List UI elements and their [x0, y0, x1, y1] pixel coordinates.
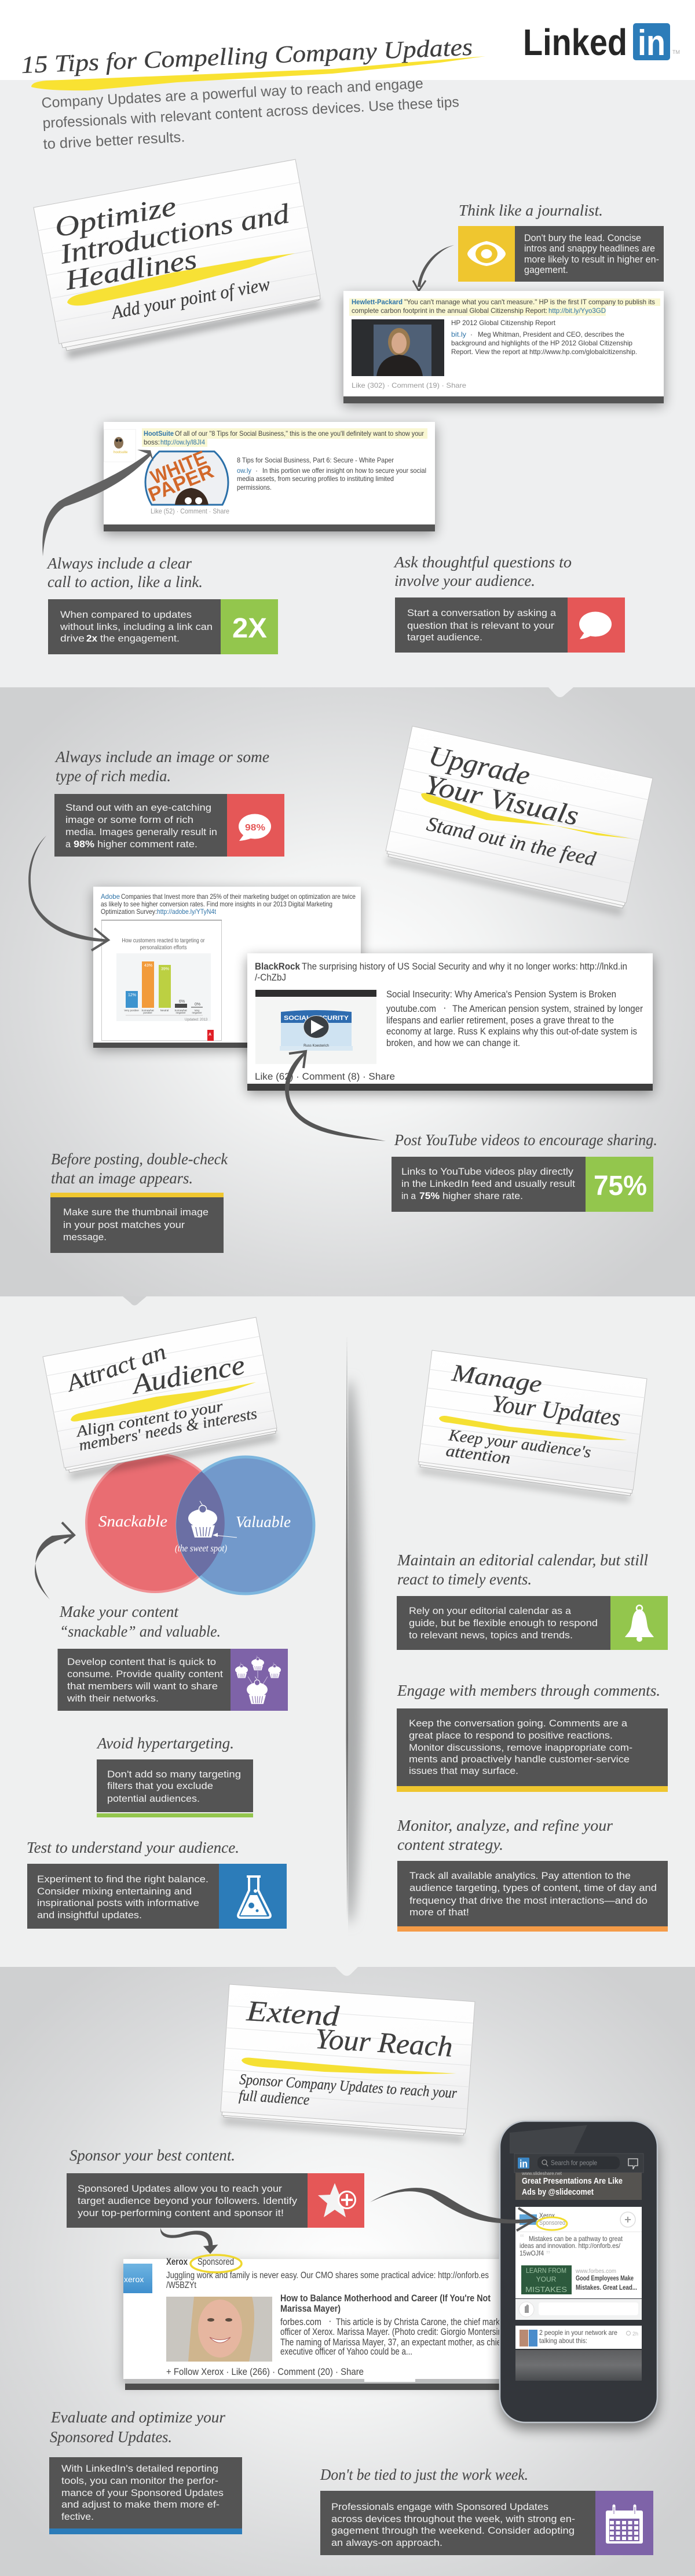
tip box: comments: great place to respond to positive reactions. [409, 1730, 613, 1741]
title with yellow brush stroke [21, 34, 485, 90]
phone post card: “ [520, 2232, 524, 2245]
heading: editorial calendar: Maintain an editorial calendar, but still [397, 1551, 648, 1569]
tip box: targeting: Don't add so many targeting [107, 1769, 241, 1780]
LinkedIn post: Hewlett-Packard: bit.ly [451, 330, 466, 338]
tip box: journalist: Don't bury the lead. Concise [524, 232, 641, 243]
phone top bar [514, 2154, 643, 2173]
bar chart: customer reaction: 6% [179, 1000, 185, 1004]
LinkedIn post: Hewlett-Packard: Like (302) · Comment (19) · Share [352, 381, 466, 389]
icon: eye [458, 226, 515, 282]
phone banner [515, 2171, 642, 2200]
tip box: thumbnail: message. [63, 1231, 107, 1243]
tip box: analytics: more of that! [409, 1907, 469, 1918]
LinkedIn post: Xerox: forbes.com [280, 2316, 321, 2327]
intro text: to drive better results. [43, 129, 185, 152]
phone post card: ” [546, 2249, 550, 2262]
tip box: 2X: the engagement. [100, 633, 180, 644]
tip box: 2X: When compared to updates [60, 609, 192, 620]
phone post card: 15wOJf4 [520, 2249, 544, 2257]
venn diagram: snackable and valuable: (the sweet spot) [175, 1543, 227, 1554]
tip box: analytics [397, 1861, 668, 1932]
LinkedIn post: Hewlett-Packard: background and highlights of the HP 2012 Global Citizenship [451, 339, 632, 347]
LinkedIn post: Hewlett-Packard: Meg Whitman, President and CEO, describes the [478, 330, 624, 338]
bar chart: customer reaction: How customers reacted to targeting or [122, 937, 205, 944]
video thumbnail: social security: SOCIAL SECURITY [284, 1015, 349, 1022]
arrow: down to Xerox post [160, 2228, 216, 2253]
LinkedIn post: Adobe [93, 887, 361, 1050]
tip box: 2X [48, 599, 278, 654]
heading: double-check image: that an image appears. [51, 1169, 193, 1187]
tip box: 98%: image or some form of rich [65, 814, 193, 825]
LinkedIn post: Xerox: Xerox [166, 2256, 188, 2267]
LinkedIn post: HootSuite: ow.ly [237, 467, 251, 475]
tip box: experiment: inspirational posts with informative [37, 1897, 199, 1908]
tip box: questions [395, 597, 625, 653]
image: white paper badge: WHITE [148, 447, 210, 489]
bar chart: customer reaction: Updated: 2013 [185, 1018, 208, 1022]
LinkedIn post: HootSuite: In this portion we offer insight on how to secure your social [262, 467, 426, 475]
LinkedIn post: Hewlett-Packard: Hewlett-Packard [352, 298, 403, 306]
bar chart: customer reaction: negative [175, 1011, 186, 1014]
tip box: reporting tools: fective. [61, 2511, 94, 2522]
tip box: targeting: potential audiences. [107, 1793, 200, 1804]
section background: extend reach [0, 1967, 695, 2576]
image: white paper badge [145, 447, 228, 506]
phone top bar: in [520, 2158, 528, 2170]
heading: thoughtful questions: Ask thoughtful questions to [393, 553, 572, 571]
arrow: to YouTube thumbnail [285, 1051, 386, 1141]
tip box: snackable content: consume. Provide quality content [67, 1668, 223, 1679]
heading: evaluate and optimize: Sponsored Updates. [50, 2428, 172, 2446]
LinkedIn post: HootSuite: Like (52) · Comment · Share [151, 507, 229, 515]
note card: attract an audience [43, 1317, 277, 1479]
title with yellow brush stroke: 15 Tips for Compelling Company Updates [21, 34, 473, 79]
venn diagram: snackable and valuable [86, 1454, 314, 1594]
phone post card: Mistakes can be a pathway to great [529, 2235, 623, 2243]
LinkedIn post: BlackRock [247, 953, 653, 1093]
video thumbnail: social security [255, 990, 376, 1064]
LinkedIn post: Xerox: Juggling work and family is never easy. Our CMO shares some practical advice: http://onforb.es [166, 2271, 489, 2280]
note card: upgrade your visuals: Upgrade [426, 740, 533, 792]
tip box: thumbnail: Make sure the thumbnail image [63, 1207, 209, 1218]
LinkedIn post: HootSuite: 8 Tips for Social Business, Part 6: Secure - White Paper [237, 456, 394, 464]
tip box: 98%: a [65, 839, 71, 850]
tip box: comments [397, 1708, 668, 1792]
tip box: 2X: drive [60, 633, 85, 644]
phone post card: ideas and innovation. http://onforb.es/ [520, 2242, 621, 2250]
LinkedIn post: Xerox: How to Balance Motherhood and Career (If You're Not [280, 2293, 491, 2304]
tip box: reporting tools: With LinkedIn's detailed reporting [61, 2463, 218, 2474]
heading: not just the work week: Don't be tied to just the work week. [320, 2466, 528, 2483]
tip box: always on: an always-on approach. [331, 2537, 442, 2548]
LinkedIn post: Xerox [123, 2256, 517, 2390]
callout: phone sponsored highlight [537, 2217, 567, 2230]
tip box: comments: Monitor discussions, remove inappropriate com- [409, 1742, 632, 1753]
bar chart: customer reaction: 12% [128, 993, 136, 997]
LinkedIn logo: TM [672, 49, 680, 55]
arrow: to Adobe post [28, 836, 108, 950]
photo: speaker [352, 319, 444, 376]
LinkedIn post: Hewlett-Packard: Report. View the report at http://www.hp.com/globalcitizenship. [451, 348, 637, 356]
tip box: snackable content: Develop content that is quick to [67, 1656, 216, 1667]
heading: test your audience: Test to understand your audience. [27, 1839, 239, 1856]
bar chart: customer reaction: positive [143, 1011, 152, 1014]
heading: snackable and valuable: Make your content [59, 1603, 180, 1620]
tip box: thumbnail: in your post matches your [63, 1219, 185, 1230]
section background: visuals [0, 687, 695, 1296]
LinkedIn post: Adobe: Optimization Survey: [101, 908, 157, 916]
icon: speech bubble [579, 612, 612, 639]
LinkedIn post: HootSuite: media assets, from securing profiles to instituting limited [237, 475, 394, 483]
tip box: reporting tools: mance of your Sponsored Updates [61, 2487, 224, 2498]
note card: extend your reach: Your Reach [314, 2022, 453, 2063]
tip box: experiment: Consider mixing entertaining and [37, 1886, 192, 1897]
bar chart: customer reaction: Very [194, 1009, 200, 1012]
tip box: 75%: 75% [594, 1171, 647, 1201]
tip box: analytics: Track all available analytics. Pay attention to the [409, 1870, 631, 1881]
LinkedIn post: BlackRock: broken, and how we can change it. [386, 1037, 520, 1048]
tip box: 75%: in the LinkedIn feed and usually result [401, 1178, 575, 1189]
logo: xerox: xerox [124, 2275, 144, 2284]
tip box: always on: gagement through the weekend. Consider adopting [331, 2525, 575, 2536]
tip box: 2X: without links, including a link can [60, 621, 213, 632]
tip box: sponsored updates: target audience beyond your followers. Identify [78, 2195, 298, 2206]
phone banner: www.slideshare.net [521, 2171, 562, 2176]
venn diagram: snackable and valuable: Snackable [98, 1513, 167, 1530]
phone like row [515, 2299, 642, 2320]
LinkedIn logo: in [638, 23, 665, 63]
heading: monitor and analyze: Monitor, analyze, and refine your [397, 1817, 613, 1834]
note card: manage your updates [418, 1350, 647, 1502]
tip box: 75%: in a [401, 1190, 416, 1201]
tip box: questions: target audience. [407, 632, 482, 643]
heading: clear call to action: call to action, like a link. [47, 573, 203, 591]
LinkedIn post: HootSuite: permissions. [237, 483, 272, 491]
phone network card: talking about this: [539, 2337, 587, 2345]
LinkedIn post: Xerox: The naming of Marissa Mayer, 37, an expectant mother, as chief [280, 2337, 503, 2348]
LinkedIn post: BlackRock: /-ChZbJ [255, 972, 286, 983]
LinkedIn post: HootSuite: http://ow.ly/l8JI4 [160, 438, 205, 446]
arrow: to phone [370, 2188, 536, 2231]
icon: 98% bubble [239, 814, 271, 841]
video thumbnail: social security: Russ Koesterich [303, 1044, 329, 1048]
heading: evaluate and optimize: Evaluate and optimize your [50, 2409, 225, 2426]
icon: hootsuite owl: hootsuite [114, 451, 128, 454]
tip box: journalist: intros and snappy headlines are [524, 243, 655, 254]
note card: upgrade your visuals: Your Visuals [422, 769, 581, 832]
LinkedIn post: BlackRock: Like (62) · Comment (8) · Share [255, 1071, 395, 1082]
photo: Marissa Mayer [166, 2297, 272, 2362]
heading: double-check image [51, 1150, 228, 1187]
bar chart: customer reaction: 0% [195, 1003, 200, 1007]
icon: cupcakes [235, 1656, 281, 1704]
heading: monitor and analyze: content strategy. [397, 1836, 503, 1853]
tip box: thumbnail [50, 1193, 224, 1253]
tip box: 98%: Stand out with an eye-catching [65, 802, 211, 813]
icon: star with plus [318, 2183, 356, 2217]
chalkboard thumbnail: MISTAKES [525, 2285, 567, 2294]
phone post card: Good Employees Make [576, 2274, 634, 2282]
note card: attract an audience: members' needs & interests [78, 1405, 258, 1454]
note card: extend your reach: full audience [239, 2087, 310, 2108]
tip box: journalist: gagement. [524, 264, 568, 275]
image: white paper badge: PAPER [145, 460, 217, 506]
tip box: 98% [54, 794, 284, 857]
tip box: 75%: higher share rate. [442, 1190, 523, 1201]
heading: sponsor best content: Sponsor your best content. [70, 2147, 235, 2164]
LinkedIn post: Xerox: Marissa Mayer) [280, 2303, 341, 2314]
heading: thoughtful questions: involve your audience. [394, 572, 535, 589]
LinkedIn post: Xerox: Sponsored [197, 2256, 234, 2267]
heading: evaluate and optimize [50, 2409, 225, 2446]
LinkedIn post: Hewlett-Packard [343, 291, 664, 406]
note card: optimize introductions and headlines [34, 159, 320, 358]
LinkedIn post: BlackRock: Social Insecurity: Why America's Pension System is Broken [386, 989, 616, 1000]
logo: xerox [123, 2264, 152, 2293]
LinkedIn post: Adobe: http://adobe.ly/YTyN4t [157, 908, 217, 916]
note card: manage your updates: Keep your audience's [447, 1426, 592, 1462]
tip box: analytics: frequency that drive the most interactions—and do [409, 1895, 648, 1906]
tip box: always on [320, 2491, 653, 2555]
phone post card: Mistakes. Great Lead... [576, 2283, 637, 2291]
tip box: always on: across devices throughout the week, with strong en- [331, 2513, 575, 2524]
phone with LinkedIn feed [499, 2121, 658, 2429]
phone top bar: Search for people [551, 2159, 597, 2167]
tip box: targeting [97, 1759, 253, 1817]
tip box: comments: issues that may surface. [409, 1765, 518, 1776]
note card: extend your reach: Sponsor Company Updates to reach your [239, 2071, 458, 2101]
phone banner: Great Presentations Are Like [522, 2176, 623, 2186]
tip box: sponsored updates: Sponsored Updates allow you to reach your [78, 2183, 282, 2194]
arrow: to HP post [413, 245, 454, 291]
venn diagram: snackable and valuable: Valuable [236, 1513, 291, 1531]
tip box: reporting tools: and adjust to make them more ef- [61, 2499, 220, 2510]
note card: optimize introductions and headlines: Add your point of view [109, 273, 272, 323]
tip box: experiment: Experiment to find the right balance. [37, 1874, 209, 1885]
tip box: experiment: and insightful updates. [37, 1910, 142, 1921]
tip box: sponsored updates: your top-performing content and sponsor it! [78, 2207, 284, 2218]
heading: rich media [54, 748, 269, 785]
note card: optimize introductions and headlines: Optimize [52, 191, 178, 243]
bar chart: customer reaction: Somewhat [141, 1009, 154, 1012]
tip box: journalist [458, 226, 664, 282]
note card: extend your reach [221, 1984, 475, 2143]
phone post card [515, 2207, 642, 2298]
tip box: 98%: 98% [74, 839, 94, 850]
tip box: 75% [392, 1157, 653, 1212]
LinkedIn post: Xerox: · [328, 2315, 332, 2326]
icon: calendar [606, 2506, 643, 2544]
tip box: editorial calendar: to relevant news, topics and trends. [409, 1630, 573, 1641]
LinkedIn post: Xerox: This article is by Christa Carone, the chief marketing [336, 2316, 517, 2327]
LinkedIn post: HootSuite [104, 422, 435, 534]
bar chart: customer reaction: personalization efforts [140, 944, 186, 951]
tip box: questions: Start a conversation by asking a [407, 607, 557, 618]
LinkedIn post: HootSuite: HootSuite [144, 429, 174, 438]
LinkedIn post: Xerox: + Follow Xerox · Like (266) · Comment (20) · Share [166, 2366, 364, 2377]
section notch 3 [335, 1967, 358, 1976]
chalkboard thumbnail: LEARN FROM [526, 2267, 566, 2275]
icon: cupcake [188, 1501, 217, 1537]
bar chart: customer reaction [101, 920, 222, 1041]
icon: hootsuite owl [114, 437, 128, 454]
LinkedIn post: Xerox: executive officer of Yahoo could be a... [280, 2346, 412, 2357]
heading: monitor and analyze [397, 1817, 613, 1853]
LinkedIn logo: Linked [523, 21, 627, 63]
note card: manage your updates: attention [445, 1442, 511, 1468]
tip box: 75%: Links to YouTube videos play directly [401, 1166, 574, 1177]
chalkboard thumbnail [521, 2265, 572, 2294]
note card: attract an audience: Attract an [61, 1338, 169, 1397]
note card: upgrade your visuals: Stand out in the feed [425, 812, 598, 870]
LinkedIn post: Hewlett-Packard: http://bit.ly/Yyo3GD [548, 307, 606, 315]
column divider [346, 1342, 370, 1925]
LinkedIn post: Adobe: Adobe [101, 892, 120, 901]
bar chart: customer reaction: A [209, 1033, 211, 1037]
intro text: professionals with relevant content across devices. Use these tips [42, 94, 459, 132]
intro text [41, 75, 459, 152]
LinkedIn post: Hewlett-Packard: complete carbon footprint in the annual Global Citizenship Report: [352, 307, 547, 315]
LinkedIn post: HootSuite: boss: [144, 438, 160, 446]
tip box: experiment [27, 1864, 287, 1929]
LinkedIn post: HootSuite: Of all of our "8 Tips for Social Business," this is the one you'll definitely want to show your [175, 429, 424, 438]
callout: sponsored highlight [191, 2255, 242, 2272]
heading: avoid hypertargeting: Avoid hypertargeting. [96, 1735, 234, 1752]
tip box: editorial calendar: guide, but be flexible enough to respond [409, 1617, 598, 1628]
tip box: 75%: 75% [419, 1190, 440, 1201]
bar chart: customer reaction: Neutral [160, 1009, 169, 1012]
section notch 2 [123, 1296, 147, 1305]
heading: clear call to action: Always include a clear [46, 555, 192, 572]
bar chart: customer reaction: Very positive [124, 1009, 139, 1012]
heading: editorial calendar: react to timely events. [397, 1571, 532, 1588]
note card: optimize introductions and headlines: Introductions and [57, 198, 292, 270]
tip box: 98%: media. Images generally result in [65, 826, 217, 837]
heading: engage through comments: Engage with members through comments. [397, 1682, 660, 1699]
heading: clear call to action [46, 555, 203, 591]
phone post card: www.forbes.com [575, 2268, 616, 2275]
bar chart: customer reaction: Somewhat [174, 1009, 187, 1012]
section background: audience and updates [0, 1296, 695, 1967]
tip box: snackable content: that members will want to share [67, 1681, 218, 1692]
note card: manage your updates: Your Updates [491, 1390, 622, 1431]
phone banner: Ads by @slidecomet [522, 2187, 594, 2197]
LinkedIn post: BlackRock: economy at large. Russ K explains why this out-of-date system is [386, 1026, 637, 1037]
phone post card: Xerox [539, 2211, 555, 2220]
tip box: questions: question that is relevant to your [407, 620, 554, 631]
heading: snackable and valuable: “snackable” and valuable. [60, 1623, 221, 1640]
tip box: 2X: 2x [86, 633, 98, 644]
heading: double-check image: Before posting, double-check [51, 1150, 228, 1168]
LinkedIn post: HootSuite: · [255, 467, 258, 475]
tip box: comments: ments and proactively handle customer-service [409, 1754, 630, 1765]
LinkedIn post: Hewlett-Packard: · [470, 330, 473, 338]
tip box: snackable content: with their networks. [67, 1693, 159, 1704]
LinkedIn post: Hewlett-Packard: HP 2012 Global Citizenship Report [451, 319, 556, 327]
arrow: to HootSuite post [42, 450, 153, 556]
tip box: 2X: 2X [232, 613, 267, 644]
tip box: editorial calendar: Rely on your editorial calendar as a [409, 1605, 572, 1616]
note card: upgrade your visuals [386, 726, 653, 916]
phone network card: 2h [632, 2331, 638, 2337]
section notch 1 [548, 687, 573, 697]
heading: snackable and valuable [59, 1603, 221, 1640]
tip box: targeting: filters that you exclude [107, 1780, 213, 1791]
LinkedIn post: Adobe: Companies that Invest more than 25% of their marketing budget on optimization are twice [121, 892, 356, 901]
LinkedIn post: Xerox: /W5BZYt [166, 2280, 197, 2290]
arrow: to venn diagram [35, 1522, 74, 1599]
LinkedIn post: BlackRock: lifespans and earlier retirement, poses a grave threat to the [386, 1015, 614, 1026]
icon: 98% bubble: 98% [245, 823, 265, 833]
tip box: analytics: audience targeting, types of content, time of day and [409, 1882, 657, 1893]
heading: post YouTube videos: Post YouTube videos to encourage sharing. [394, 1131, 657, 1149]
heading: rich media: type of rich media. [56, 767, 171, 785]
intro text: Company Updates are a powerful way to reach and engage [41, 75, 423, 111]
LinkedIn post: BlackRock: BlackRock [255, 961, 300, 972]
header background [0, 0, 695, 80]
note card: manage your updates: Manage [450, 1360, 543, 1398]
LinkedIn post: Adobe: as likely to see higher conversion rates. Find more insights in our 2013 Digital Marketing [101, 900, 332, 908]
icon: bell [625, 1605, 654, 1642]
note card: attract an audience: Align content to your [74, 1397, 225, 1440]
tip box: 98%: higher comment rate. [97, 839, 197, 850]
LinkedIn post: BlackRock: The surprising history of US Social Security and why it no longer works: [302, 961, 578, 972]
phone network card [515, 2326, 642, 2349]
tip box: comments: Keep the conversation going. Comments are a [409, 1718, 628, 1729]
heading: thoughtful questions [393, 553, 572, 589]
note card: attract an audience: Audience [128, 1350, 247, 1400]
tip box: journalist: more likely to result in higher en- [524, 254, 659, 265]
chalkboard thumbnail: YOUR [536, 2275, 557, 2283]
tip box: reporting tools: tools, you can monitor the perfor- [61, 2475, 218, 2486]
icon: flask [238, 1875, 270, 1918]
phone post card: Sponsored [539, 2220, 565, 2227]
note card: optimize introductions and headlines: Headlines [63, 244, 199, 296]
LinkedIn post: Hewlett-Packard: "You can't manage what you can't measure." HP is the first IT company to publish its [404, 298, 655, 306]
tip box: always on: Professionals engage with Sponsored Updates [331, 2501, 548, 2512]
heading: rich media: Always include an image or some [54, 748, 269, 766]
heading: editorial calendar [397, 1551, 648, 1588]
LinkedIn post: Xerox: officer of Xerox. Marissa Mayer. (Photo credit: Giorgio Montersino) [280, 2326, 509, 2337]
phone network card: 2 people in your network are [539, 2329, 617, 2337]
tip box: reporting tools [49, 2457, 242, 2534]
tip box: snackable content [58, 1649, 288, 1711]
tip box: editorial calendar [397, 1596, 668, 1650]
note card: extend your reach: Extend [245, 1994, 341, 2032]
section background: optimize [0, 80, 695, 687]
tip box: sponsored updates [67, 2173, 364, 2228]
bar chart: customer reaction: negative [192, 1011, 202, 1014]
LinkedIn post: BlackRock: · [443, 1002, 447, 1013]
bar chart: customer reaction: 39% [161, 967, 169, 971]
bar chart: customer reaction: 43% [144, 964, 152, 968]
heading: think like a journalist: Think like a journalist. [459, 202, 603, 219]
LinkedIn post: BlackRock: The American pension system, strained by longer [452, 1003, 643, 1014]
LinkedIn post: BlackRock: http://lnkd.in [580, 961, 627, 972]
LinkedIn post: BlackRock: youtube.com [386, 1003, 436, 1014]
